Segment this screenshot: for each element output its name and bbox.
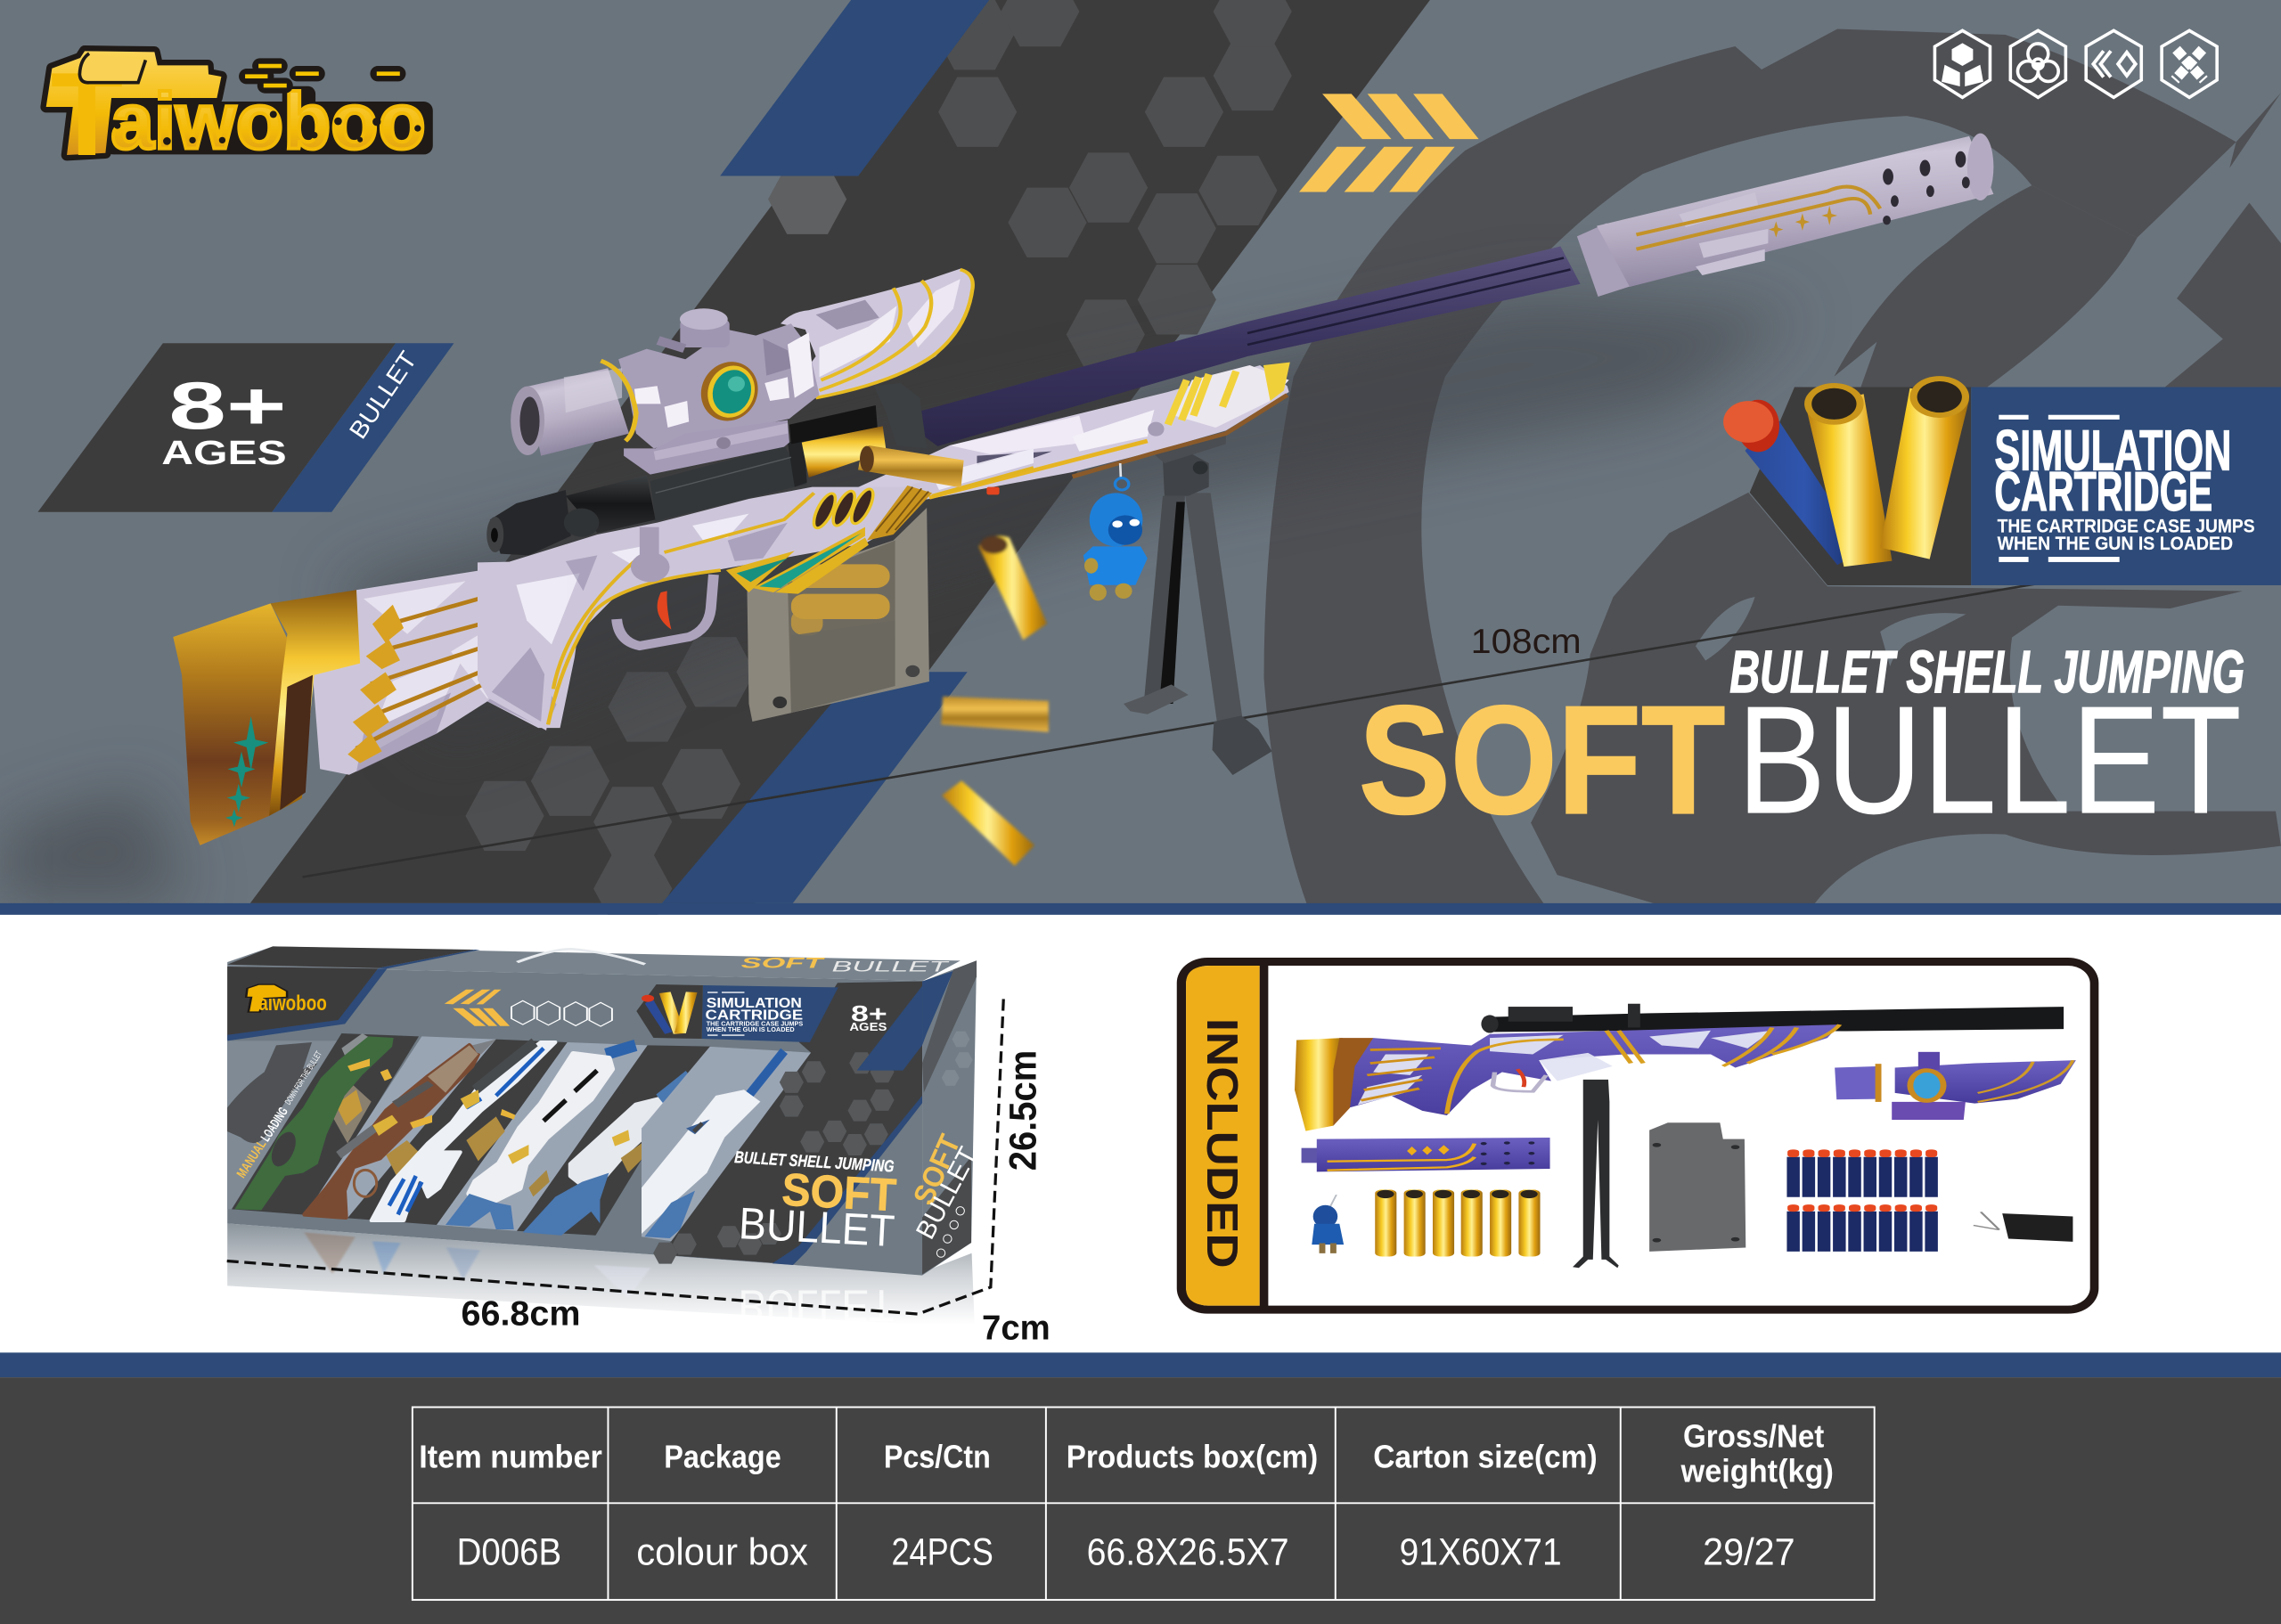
box gray strip six <box>642 1047 811 1241</box>
simulation cartridge callout <box>1723 376 2281 585</box>
table header row <box>419 1417 1834 1489</box>
box callout panel <box>702 985 838 1042</box>
logo dots <box>114 110 421 145</box>
table data row: 29/27 <box>1703 1531 1795 1573</box>
table data row: 91X60X71 <box>1400 1531 1562 1573</box>
box side text: BULLET <box>911 1142 984 1245</box>
top face text: SOFT <box>741 955 826 972</box>
hexagon pattern <box>465 0 1292 924</box>
product box: THE CARTRIDGE CASE JUMPS <box>707 1020 803 1027</box>
table data row: colour box <box>636 1531 808 1573</box>
trigger <box>658 591 671 630</box>
dragon on box <box>227 1042 318 1143</box>
rear sight ring <box>874 383 927 448</box>
scope gold lines <box>816 270 973 398</box>
box gun strip text: MANUAL <box>234 1138 269 1181</box>
ejected shell <box>858 445 964 487</box>
bolt handle <box>631 527 669 582</box>
label: depth: 7cm <box>982 1310 1051 1348</box>
scope front lens <box>527 368 629 456</box>
blue divider band <box>0 1352 2281 1377</box>
box headline: BULLET <box>738 1198 895 1256</box>
box icons <box>511 1000 612 1026</box>
length label: 108cm <box>1471 623 1582 661</box>
rifle stock <box>1333 1024 1840 1126</box>
table data row: 24PCS <box>891 1531 993 1573</box>
gold arrows on stock <box>347 578 525 763</box>
callout title: THE CARTRIDGE CASE JUMPS <box>1998 517 2255 537</box>
logo speed dashes <box>247 66 398 86</box>
blue and white rifle <box>372 1042 555 1220</box>
table header row: Carton size(cm) <box>1373 1438 1598 1474</box>
flying shell casings <box>941 535 1049 866</box>
stock light facets <box>1358 1031 1772 1105</box>
handle <box>517 949 645 964</box>
bipod <box>1124 432 1271 775</box>
box headline: SOFT <box>781 1163 897 1220</box>
table data row: D006B <box>457 1531 561 1573</box>
included suppressor <box>1302 1138 1550 1171</box>
box logo tile <box>227 967 378 1040</box>
white product section <box>0 915 2281 1352</box>
included shells <box>1375 1189 1541 1257</box>
hero bottom blue band <box>0 903 2281 915</box>
age badge: AGES <box>161 434 287 471</box>
scope rear tube <box>781 269 973 403</box>
dark diagonal band <box>250 0 1430 903</box>
top face text <box>741 955 951 975</box>
box front face <box>227 967 923 1274</box>
box gray wedge <box>795 1096 922 1276</box>
box top face <box>227 946 961 981</box>
yellow chevron arrows <box>1299 94 1479 192</box>
age badge <box>37 343 454 512</box>
gold chamber <box>802 426 887 477</box>
box gun strip text: DOWN FOR THE BULLET <box>283 1049 324 1106</box>
product box: WHEN THE GUN IS LOADED <box>707 1026 795 1033</box>
length measuring line <box>303 579 2065 877</box>
receiver gold vents <box>810 487 878 530</box>
barrel <box>898 246 1581 446</box>
age badge: 8+ <box>168 369 287 444</box>
scope mount <box>624 420 789 475</box>
table data row <box>457 1531 1795 1573</box>
logo wordmark <box>51 48 426 181</box>
table data row: 66.8X26.5X7 <box>1087 1531 1289 1573</box>
callout title <box>1994 419 2255 554</box>
included scope <box>1835 1052 2076 1120</box>
gold accents <box>1447 1024 1840 1114</box>
box side text: SOFT <box>908 1130 968 1210</box>
product box: aiwoboo <box>258 991 327 1015</box>
handguard <box>806 363 1290 519</box>
box hex pattern <box>653 1052 895 1264</box>
receiver stock body <box>478 448 1034 730</box>
rifle trigger guard <box>1492 1073 1546 1091</box>
central rifle body <box>747 383 929 722</box>
included label: INCLUDED <box>1198 1018 1246 1269</box>
rifle barrel <box>1484 1007 2064 1032</box>
rifle butt <box>1295 1038 1343 1131</box>
dark hex backing <box>1750 387 1971 585</box>
included contents panel <box>1177 958 2098 1314</box>
logo wordmark: aiwoboo <box>110 77 426 166</box>
product box: CARTRIDGE <box>705 1008 803 1023</box>
box headline: BULLET SHELL JUMPING <box>734 1147 895 1176</box>
soft dart <box>1745 414 1864 565</box>
reflected box text: BULLET <box>738 1280 894 1330</box>
dark action <box>789 405 878 444</box>
stock facets <box>364 581 538 757</box>
stock body <box>313 555 582 775</box>
logo: Taiwoboo <box>46 48 433 181</box>
frame <box>1177 958 2098 1314</box>
age badge: BULLET <box>344 347 422 444</box>
white shotgun <box>642 1051 784 1238</box>
specification table <box>413 1408 1875 1600</box>
reflected guns <box>304 1232 650 1298</box>
table header row: Products box(cm) <box>1067 1438 1318 1474</box>
butt pad <box>173 603 302 845</box>
label: width: 66.8cm <box>462 1294 580 1333</box>
blue diagonal accent bottom <box>662 672 968 903</box>
trigger guard <box>617 575 714 646</box>
box headline <box>734 1147 897 1256</box>
receiver gold lines <box>548 468 1034 724</box>
green and gold fins <box>726 486 932 594</box>
box chevrons <box>445 990 510 1026</box>
gray receiver <box>650 445 807 521</box>
box dark right area <box>659 982 922 1264</box>
green rifle <box>234 1033 394 1210</box>
box blue accents <box>857 986 922 1071</box>
butt gold sleeve <box>269 590 360 816</box>
gold shells <box>1806 394 1892 567</box>
blue panel <box>1971 387 2281 585</box>
table header row: Pcs/Ctn <box>884 1438 991 1474</box>
scope lens ring <box>696 358 764 425</box>
scope turret <box>657 308 730 353</box>
box age mark: AGES <box>849 1021 887 1033</box>
black bolt <box>566 475 656 533</box>
box gun strip text <box>234 1049 324 1181</box>
box age mark: 8+ <box>851 1002 887 1027</box>
box logo <box>246 984 327 1015</box>
callout title: WHEN THE GUN IS LOADED <box>1998 534 2233 554</box>
table header row: weight(kg) <box>1680 1453 1834 1489</box>
logo gun window <box>79 53 145 83</box>
teal stars <box>225 716 268 827</box>
blue diagonal accent top <box>720 0 989 176</box>
table header row: Package <box>664 1438 781 1474</box>
box side face <box>922 960 977 1276</box>
scope central body <box>618 323 820 448</box>
receiver facets <box>516 448 1034 644</box>
logo dark backing <box>104 86 433 154</box>
keychain doll <box>1083 463 1148 600</box>
suppressor <box>1577 134 1993 297</box>
product box <box>227 946 984 1330</box>
hero panel background <box>0 0 2281 904</box>
sniper rifle illustration <box>173 134 1993 866</box>
label: height: 26.5cm <box>1002 1050 1043 1171</box>
dark footer <box>0 1377 2281 1624</box>
table header row: Item number <box>419 1438 602 1474</box>
box reflection <box>227 1223 975 1325</box>
headline: soft: SOFT <box>1359 673 1725 846</box>
table header row: Gross/Net <box>1683 1417 1824 1454</box>
box gun strips <box>227 1033 710 1236</box>
included doll <box>1312 1195 1344 1253</box>
included darts <box>1786 1149 1938 1252</box>
yellow tab <box>1186 966 1260 1306</box>
included magazine <box>1649 1122 1745 1252</box>
magazine <box>747 508 929 722</box>
product box: SIMULATION <box>707 995 802 1010</box>
feature icons <box>1934 30 2217 97</box>
logo wordmark: T <box>51 48 123 181</box>
top face text: BULLET <box>831 959 951 975</box>
soft gun shadow <box>0 291 1803 903</box>
included bipod <box>1573 1080 1619 1268</box>
included rifle <box>1295 1004 2064 1131</box>
box gun strip text: LOADING <box>258 1105 291 1145</box>
box dimension lines <box>227 993 1004 1314</box>
white and blue rifle <box>523 1075 689 1236</box>
red pin <box>986 487 1000 494</box>
short rules <box>1999 415 2120 562</box>
logo gun T <box>46 51 221 155</box>
included strap <box>1974 1212 2073 1242</box>
dragon emblem background <box>1263 29 2281 904</box>
box age mark <box>849 1002 887 1033</box>
white assault rifle <box>446 1045 635 1229</box>
brown rifle <box>305 1040 496 1218</box>
